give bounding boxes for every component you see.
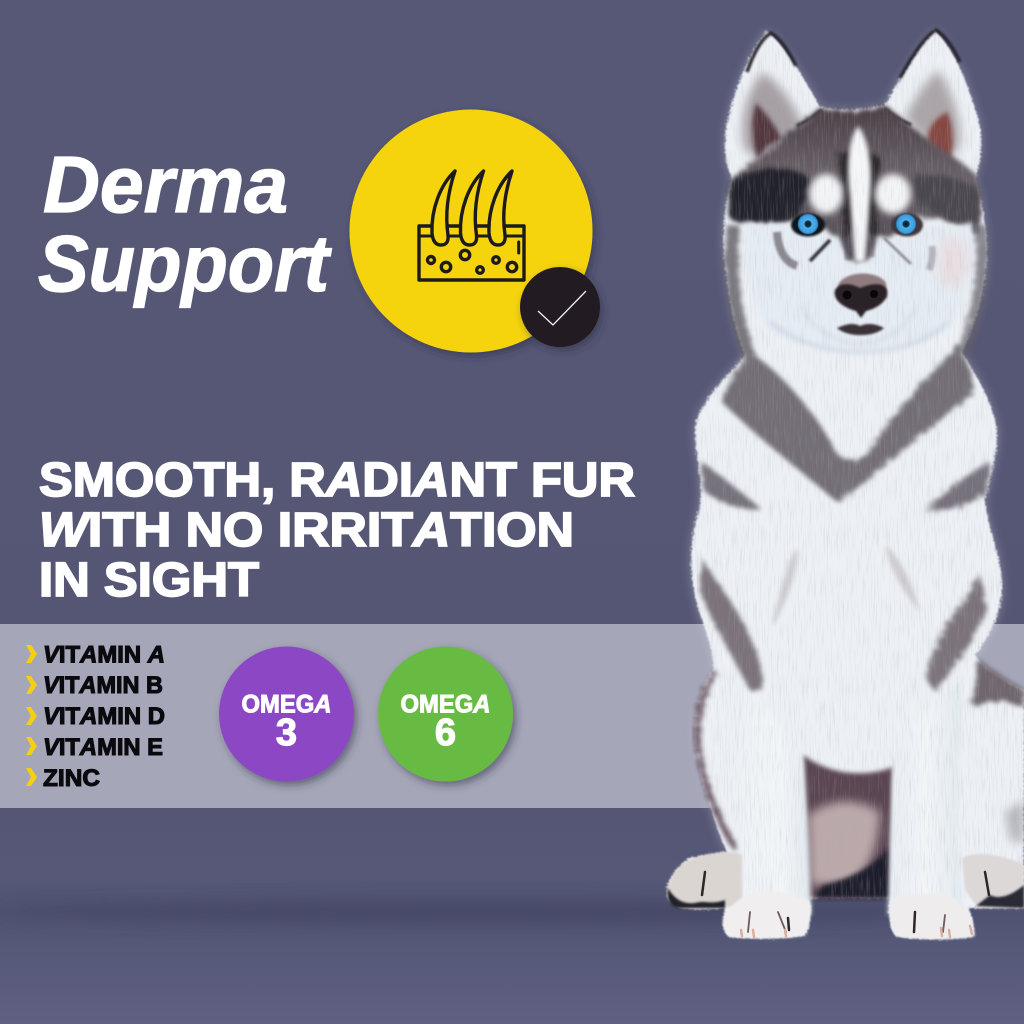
shoulder stripes	[702, 462, 990, 512]
headline: SMOOTH, R ADIANT FUR	[39, 454, 635, 507]
husky illustration	[660, 20, 1024, 940]
title: Derma	[43, 140, 288, 229]
soft fur halo	[691, 30, 1002, 852]
grey right patch	[912, 174, 980, 230]
toe lines and claws	[702, 872, 989, 937]
ear base lines	[797, 108, 911, 126]
check badge	[520, 267, 600, 347]
chest V marking	[722, 345, 973, 503]
face mask	[743, 222, 973, 350]
fur streak texture	[692, 30, 1023, 898]
side markings	[700, 558, 987, 692]
right cheek tint	[938, 236, 968, 288]
front left leg	[739, 690, 811, 915]
list labels: VITAMIN A	[43, 642, 165, 668]
yellow circle	[350, 110, 592, 352]
dog silhouette	[667, 30, 1024, 939]
ingredient band	[0, 624, 1024, 808]
front right leg	[888, 680, 964, 915]
icon: skin and hair badge	[350, 110, 600, 352]
ears inner	[742, 70, 960, 160]
chevrons	[26, 645, 37, 786]
dark brow streaks	[838, 150, 880, 240]
headline: WITH NO IRRIT ATION	[39, 504, 574, 557]
chest tints	[772, 545, 920, 628]
ear shadows	[752, 103, 953, 160]
omega 3 badge: OMEGA	[242, 690, 332, 718]
belly	[803, 755, 893, 898]
mouth	[837, 324, 884, 335]
belly dark	[815, 848, 890, 898]
title	[38, 140, 332, 308]
forehead	[729, 105, 980, 262]
back left toes	[668, 888, 725, 908]
headline: IN SIGHT	[39, 554, 259, 607]
list labels: VITAMIN D	[43, 703, 165, 730]
skin follicle icon	[419, 171, 524, 280]
list labels: VITAMIN B	[43, 672, 163, 699]
muzzle shade	[800, 305, 916, 344]
white brows	[809, 174, 911, 214]
list labels	[43, 642, 165, 792]
list labels: ZINC	[43, 765, 100, 792]
white forehead stripe	[848, 126, 871, 262]
under eye marks	[777, 232, 932, 270]
floor shadow	[0, 902, 960, 922]
back right toes	[976, 885, 1024, 908]
eyes	[791, 214, 923, 236]
title: Support	[38, 219, 332, 308]
omega 6 badge: 6	[435, 712, 456, 754]
back left paw	[667, 852, 742, 909]
left haunch rim	[697, 672, 735, 848]
jaw shade	[770, 322, 948, 352]
front left foot	[723, 892, 811, 938]
headline	[39, 454, 635, 607]
front right foot	[890, 893, 975, 939]
omega 6 badge	[378, 646, 513, 782]
list labels: VITAMIN E	[43, 734, 163, 761]
neck sides	[732, 225, 982, 358]
omega 3 badge	[219, 646, 354, 782]
back right paw	[962, 854, 1024, 908]
omega 6 badge: OMEGA	[400, 690, 490, 718]
right haunch marking	[972, 658, 1024, 708]
vitamin list	[26, 642, 165, 792]
black eye patch	[729, 168, 810, 222]
right haunch shade	[1005, 800, 1024, 845]
omega 3 badge: 3	[276, 712, 297, 754]
nose	[835, 273, 887, 318]
belly light fur	[808, 801, 880, 885]
ear rims	[747, 30, 960, 78]
